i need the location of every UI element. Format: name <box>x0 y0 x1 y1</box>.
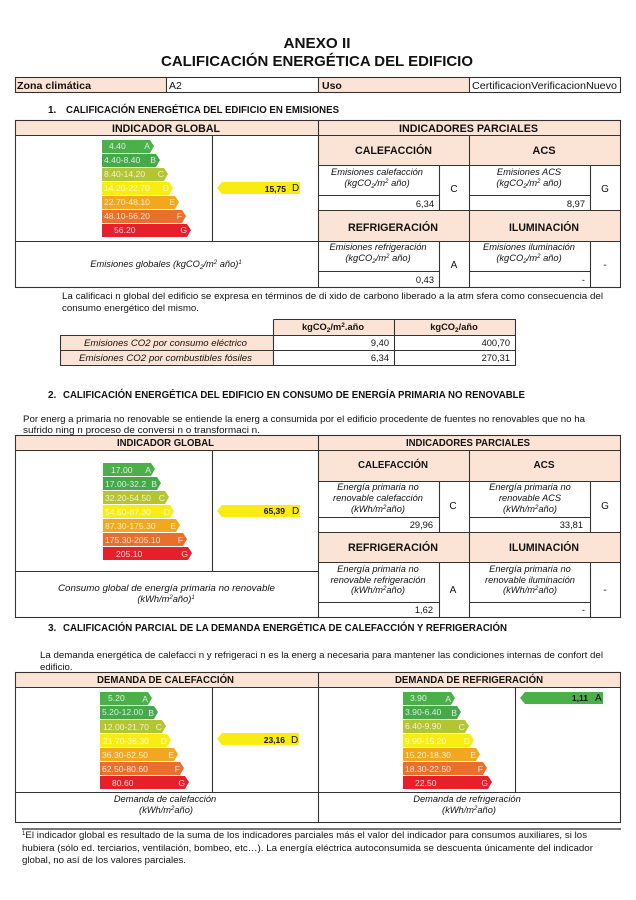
chart: primary energy scale: 54.50-87.30 <box>105 507 151 517</box>
footnote: El indicador global es resultado de la suma de los indicadores parciales más el valor del indicador para consumos auxiliares, si los <box>25 830 587 841</box>
chart: primary energy scale: D <box>164 507 170 517</box>
chart: cooling demand scale: B <box>451 708 457 718</box>
emissions explanation text: consumo energético del mismo. <box>62 303 199 314</box>
chart: cooling demand scale: 18.30-22.50 <box>405 764 451 774</box>
panel: emissions rating table: (kgCO <box>345 253 372 263</box>
panel: energy demand rating table: DEMANDA DE CALEFACCIÓN <box>97 673 234 686</box>
chart: emissions scale: 8.40-14.20 <box>104 169 145 179</box>
table: CO2 emissions by source: 400,70 <box>482 338 510 348</box>
chart: emissions scale: 56.20 <box>114 225 136 235</box>
chart: cooling demand scale: G <box>481 778 488 788</box>
chart: heating demand scale <box>100 692 189 789</box>
panel: emissions rating table: Emisiones globales (kgCO <box>90 259 200 269</box>
chart: primary energy scale: E <box>170 521 176 531</box>
panel: primary energy rating table: renovable ACS <box>499 493 562 503</box>
table: CO2 emissions by source: /año <box>459 322 478 332</box>
chart: cooling demand scale: A <box>445 694 451 704</box>
panel: primary energy rating table: C <box>449 501 457 512</box>
panel: energy demand rating table: 2 <box>170 806 175 812</box>
chart: emissions scale: E <box>169 197 175 207</box>
chart: cooling demand scale: 15.20-18.30 <box>405 750 451 760</box>
panel: emissions rating table: Emisiones ACS <box>497 167 562 177</box>
panel: energy demand rating table: (kWh/m <box>139 805 171 815</box>
table: CO2 emissions by source: 9,40 <box>371 338 389 348</box>
panel: primary energy rating table: 33,81 <box>560 520 583 530</box>
chart: heating demand scale: A <box>142 694 148 704</box>
chart: emissions scale: 22.70-48.10 <box>104 197 150 207</box>
panel: emissions rating table: 0,43 <box>416 275 434 285</box>
panel: primary energy rating table: (kWh/m <box>137 594 169 604</box>
chart: primary energy scale: F <box>178 535 183 545</box>
table: CO2 emissions by source: .año <box>345 322 364 332</box>
panel: emissions rating table: año) <box>217 259 238 269</box>
panel: primary energy rating table <box>16 436 620 618</box>
panel: emissions rating table: 2 <box>213 260 218 266</box>
panel: primary energy rating table: - <box>582 605 585 615</box>
panel: emissions rating table <box>16 120 620 288</box>
chart: emissions scale: C <box>158 169 164 179</box>
panel: emissions rating table: 8,97 <box>567 199 585 209</box>
indicator arrow: 15,75 D <box>217 182 300 194</box>
chart: emissions scale: 48.10-56.20 <box>104 211 150 221</box>
panel: primary energy rating table: ACS <box>533 460 555 471</box>
section 3 heading: CALIFICACIÓN PARCIAL DE LA DEMANDA ENERGÉTICA DE CALEFACCIÓN Y REFRIGERACIÓN <box>63 621 507 634</box>
panel: primary energy rating table: INDICADORES PARCIALES <box>406 438 530 449</box>
panel: emissions rating table: /m <box>375 253 386 263</box>
section 3 heading: 3. <box>48 623 57 634</box>
footnote: global, no así de los valores parciales. <box>22 855 186 866</box>
panel: emissions rating table: año) <box>389 253 411 263</box>
title <box>161 35 473 70</box>
panel: primary energy rating table: A <box>450 585 457 596</box>
panel: emissions rating table: año) <box>540 253 562 263</box>
primary energy explanation text: sufrido ning n proceso de conversi n o transformaci n. <box>23 425 260 436</box>
panel: primary energy rating table: renovable refrigeración <box>330 575 426 585</box>
panel: emissions rating table: C <box>450 184 458 195</box>
panel: emissions rating table: 2 <box>536 179 541 185</box>
panel: primary energy rating table: renovable calefacción <box>333 493 423 503</box>
panel: energy demand rating table: Demanda de calefacción <box>114 794 216 804</box>
climate zone and use table <box>16 78 620 92</box>
panel: emissions rating table: /m <box>202 259 214 269</box>
panel: emissions rating table: Emisiones refrigeración <box>329 242 427 252</box>
chart: emissions scale: 4.40 <box>109 141 126 151</box>
chart: emissions scale: 4.40-8.40 <box>104 155 141 165</box>
chart: primary energy scale: 175.30-205.10 <box>105 535 161 545</box>
panel: emissions rating table: /m <box>374 178 385 188</box>
panel: primary energy rating table: - <box>603 585 607 596</box>
chart: heating demand scale: B <box>148 708 154 718</box>
panel: emissions rating table: 1 <box>238 260 242 266</box>
panel: primary energy rating table: Energía primaria no <box>489 564 571 574</box>
panel: emissions rating table: - <box>582 275 585 285</box>
title: CALIFICACIÓN ENERGÉTICA DEL EDIFICIO <box>161 52 473 70</box>
chart: cooling demand scale: F <box>478 764 483 774</box>
chart: primary energy scale: 32.20-54.50 <box>105 493 151 503</box>
chart: heating demand scale: G <box>178 778 185 788</box>
panel: emissions rating table: año) <box>388 178 410 188</box>
chart: emissions scale: B <box>150 155 156 165</box>
indicator arrow: 15,75 D: 15,75 <box>265 184 286 194</box>
table: CO2 emissions by source: Emisiones CO2 por consumo eléctrico <box>84 338 247 348</box>
panel: primary energy rating table: Consumo global de energía primaria no renovable <box>58 583 275 593</box>
section 1 heading: CALIFICACIÓN ENERGÉTICA DEL EDIFICIO EN EMISIONES <box>66 103 339 116</box>
panel: primary energy rating table: 1,62 <box>415 605 433 615</box>
panel: primary energy rating table: (kWh/m <box>503 504 535 514</box>
chart: emissions scale: 14.20-22.70 <box>104 183 150 193</box>
indicator arrow: 1,11 A: A <box>595 693 602 704</box>
panel: emissions rating table: (kgCO <box>496 253 523 263</box>
energy demand explanation text: La demanda energética de calefacci n y refrigeraci n es la energ a necesaria para mantener las condiciones internas de confort del <box>40 650 603 661</box>
chart: primary energy scale: G <box>181 549 188 559</box>
chart: emissions scale: G <box>180 225 187 235</box>
table: CO2 emissions by source: 6,34 <box>371 353 389 363</box>
panel: emissions rating table: REFRIGERACIÓN <box>348 221 438 234</box>
chart: primary energy scale: A <box>145 465 151 475</box>
indicator arrow: 1,11 A <box>520 692 603 704</box>
panel: primary energy rating table: Energía primaria no <box>489 482 571 492</box>
table: CO2 emissions by source: /m <box>330 322 341 332</box>
panel: emissions rating table: 2 <box>522 183 527 190</box>
energy demand explanation text: edificio. <box>40 662 73 673</box>
panel: primary energy rating table: ILUMINACIÓN <box>509 541 579 554</box>
footnote: hubiera (sólo ed. terciarios, ventilación, bombeo, etc…). La energía eléctrica autoconsumida se descuenta únicamente del indicador <box>22 843 594 854</box>
climate zone and use table: A2 <box>169 80 182 92</box>
panel: emissions rating table: 2 <box>522 258 527 265</box>
panel: emissions rating table: CALEFACCIÓN <box>355 144 432 157</box>
panel: emissions rating table: ACS <box>532 145 556 157</box>
panel: emissions rating table: 2 <box>384 179 389 185</box>
panel: emissions rating table: INDICADORES PARCIALES <box>399 123 538 135</box>
climate zone and use table: CertificacionVerificacionNuevo <box>472 80 617 92</box>
panel: energy demand rating table: año) <box>174 805 193 815</box>
panel: primary energy rating table: (kWh/m <box>351 504 383 514</box>
panel: primary energy rating table: (kWh/m <box>351 585 383 595</box>
panel: primary energy rating table: 1 <box>191 595 195 601</box>
panel: emissions rating table: /m <box>526 178 537 188</box>
chart: cooling demand scale: 3.90-6.40 <box>405 707 442 717</box>
panel: primary energy rating table: año) <box>538 585 557 595</box>
panel: emissions rating table: (kgCO <box>344 178 371 188</box>
panel: emissions rating table: A <box>451 260 458 271</box>
table: CO2 emissions by source: 2 <box>455 327 459 334</box>
table: CO2 emissions by source <box>60 320 516 366</box>
table: CO2 emissions by source: 270,31 <box>482 353 510 363</box>
primary energy explanation text <box>23 414 586 436</box>
table: CO2 emissions by source: 2 <box>341 322 345 329</box>
panel: energy demand rating table: (kWh/m <box>442 805 474 815</box>
chart: heating demand scale: 62.50-80.60 <box>102 764 148 774</box>
indicator arrow: 23,16 D: D <box>291 735 298 746</box>
chart: heating demand scale: 36.30-62.50 <box>102 750 148 760</box>
panel: primary energy rating table: renovable iluminación <box>485 575 575 585</box>
panel: emissions rating table: G <box>601 184 609 195</box>
chart: heating demand scale: 80.60 <box>112 778 134 788</box>
panel: emissions rating table: /m <box>526 253 537 263</box>
chart: primary energy scale <box>103 463 192 560</box>
section 2 heading: CALIFICACIÓN ENERGÉTICA DEL EDIFICIO EN CONSUMO DE ENERGÍA PRIMARIA NO RENOVABLE <box>63 388 525 401</box>
indicator arrow: 65,39 D <box>217 505 300 517</box>
panel: primary energy rating table: 2 <box>168 595 173 601</box>
chart: heating demand scale: 5.20 <box>108 693 125 703</box>
chart: primary energy scale: 87.30-175.30 <box>105 521 156 531</box>
indicator arrow: 65,39 D: 65,39 <box>264 506 285 516</box>
panel: emissions rating table: - <box>603 260 607 271</box>
panel: primary energy rating table: INDICADOR GLOBAL <box>117 438 214 449</box>
primary energy explanation text: Por energ a primaria no renovable se entiende la energ a consumida por el edificio procedente de fuentes no renovables que no ha <box>23 414 586 425</box>
panel: primary energy rating table: Energía primaria no <box>337 564 419 574</box>
climate zone and use table: Uso <box>322 80 342 92</box>
chart: heating demand scale: F <box>175 764 180 774</box>
panel: emissions rating table: Emisiones iluminación <box>483 242 575 252</box>
table: CO2 emissions by source: kgCO <box>302 322 327 332</box>
panel: emissions rating table: INDICADOR GLOBAL <box>112 123 220 135</box>
panel: primary energy rating table: 2 <box>382 505 387 511</box>
panel: primary energy rating table: año) <box>538 504 557 514</box>
table: CO2 emissions by source: kgCO <box>430 322 455 332</box>
panel: emissions rating table: (kgCO <box>496 178 523 188</box>
chart: primary energy scale: B <box>151 479 157 489</box>
chart: heating demand scale: E <box>168 750 174 760</box>
chart: cooling demand scale: 6.40-9.90 <box>405 721 442 731</box>
panel: primary energy rating table: 29,96 <box>410 520 433 530</box>
chart: heating demand scale: 12.00-21.70 <box>103 722 149 732</box>
panel: primary energy rating table: año) <box>386 585 405 595</box>
section 2 heading: 2. <box>48 390 57 401</box>
panel: primary energy rating table: 2 <box>382 586 387 592</box>
emissions explanation text: La calificaci n global del edificio se expresa en términos de di xido de carbono liberado a la atm sfera como consecuencia del <box>62 291 603 302</box>
chart: primary energy scale: 205.10 <box>116 549 143 559</box>
panel: energy demand rating table: 2 <box>473 806 478 812</box>
indicator arrow: 15,75 D: D <box>292 183 299 194</box>
emissions explanation text <box>62 291 603 314</box>
panel: energy demand rating table <box>16 672 620 822</box>
panel: emissions rating table: año) <box>540 178 562 188</box>
panel: emissions rating table: 6,34 <box>416 199 434 209</box>
panel: primary energy rating table: G <box>601 501 609 512</box>
chart: heating demand scale: D <box>161 736 167 746</box>
chart: heating demand scale: C <box>156 722 162 732</box>
chart: heating demand scale: 21.70-36.30 <box>103 736 149 746</box>
indicator arrow: 23,16 D: 23,16 <box>264 735 285 745</box>
panel: primary energy rating table: (kWh/m <box>503 585 535 595</box>
panel: primary energy rating table: REFRIGERACIÓN <box>348 541 438 554</box>
panel: energy demand rating table: año) <box>477 805 496 815</box>
panel: energy demand rating table: DEMANDA DE REFRIGERACIÓN <box>395 673 543 686</box>
panel: emissions rating table: 2 <box>199 264 204 271</box>
chart: primary energy scale: 17.00 <box>111 465 133 475</box>
chart: cooling demand scale: E <box>470 750 476 760</box>
panel: emissions rating table: ILUMINACIÓN <box>509 221 579 234</box>
panel: emissions rating table: 2 <box>385 254 390 260</box>
chart: emissions scale: A <box>144 141 150 151</box>
chart: primary energy scale: 17.00-32.2 <box>105 479 146 489</box>
chart: emissions scale: F <box>177 211 182 221</box>
chart: emissions scale: D <box>163 183 169 193</box>
chart: emissions scale <box>102 140 191 237</box>
panel: primary energy rating table: 2 <box>534 586 539 592</box>
footnote <box>22 828 621 866</box>
section 1 heading: 1. <box>48 105 57 116</box>
chart: cooling demand scale: 9.90-15.20 <box>405 736 446 746</box>
chart: primary energy scale: C <box>159 493 165 503</box>
panel: primary energy rating table: Energía primaria no <box>337 482 419 492</box>
energy demand explanation text <box>40 650 603 673</box>
panel: primary energy rating table: año) <box>386 504 405 514</box>
indicator arrow: 23,16 D <box>217 733 299 746</box>
chart: cooling demand scale: 3.90 <box>410 693 427 703</box>
indicator arrow: 65,39 D: D <box>292 506 299 517</box>
chart: cooling demand scale: C <box>459 722 465 732</box>
panel: emissions rating table: 2 <box>370 183 375 190</box>
table: CO2 emissions by source: Emisiones CO2 por combustibles fósiles <box>79 353 252 363</box>
panel: emissions rating table: 2 <box>371 258 376 265</box>
chart: cooling demand scale: D <box>464 736 470 746</box>
title: ANEXO II <box>284 35 350 52</box>
panel: primary energy rating table: 2 <box>534 505 539 511</box>
table: CO2 emissions by source: 2 <box>327 327 331 334</box>
footnote: 1 <box>22 831 26 837</box>
panel: emissions rating table: 2 <box>536 254 541 260</box>
panel: primary energy rating table: CALEFACCIÓN <box>358 458 428 471</box>
indicator arrow: 1,11 A: 1,11 <box>572 693 588 703</box>
panel: energy demand rating table: Demanda de refrigeración <box>413 794 521 804</box>
panel: emissions rating table: Emisiones calefacción <box>331 167 423 177</box>
chart: heating demand scale: 5.20-12.00 <box>102 707 143 717</box>
panel: primary energy rating table: año) <box>173 594 191 604</box>
chart: cooling demand scale <box>403 692 492 789</box>
chart: cooling demand scale: 22.50 <box>415 778 437 788</box>
climate zone and use table: Zona climática <box>17 80 91 92</box>
